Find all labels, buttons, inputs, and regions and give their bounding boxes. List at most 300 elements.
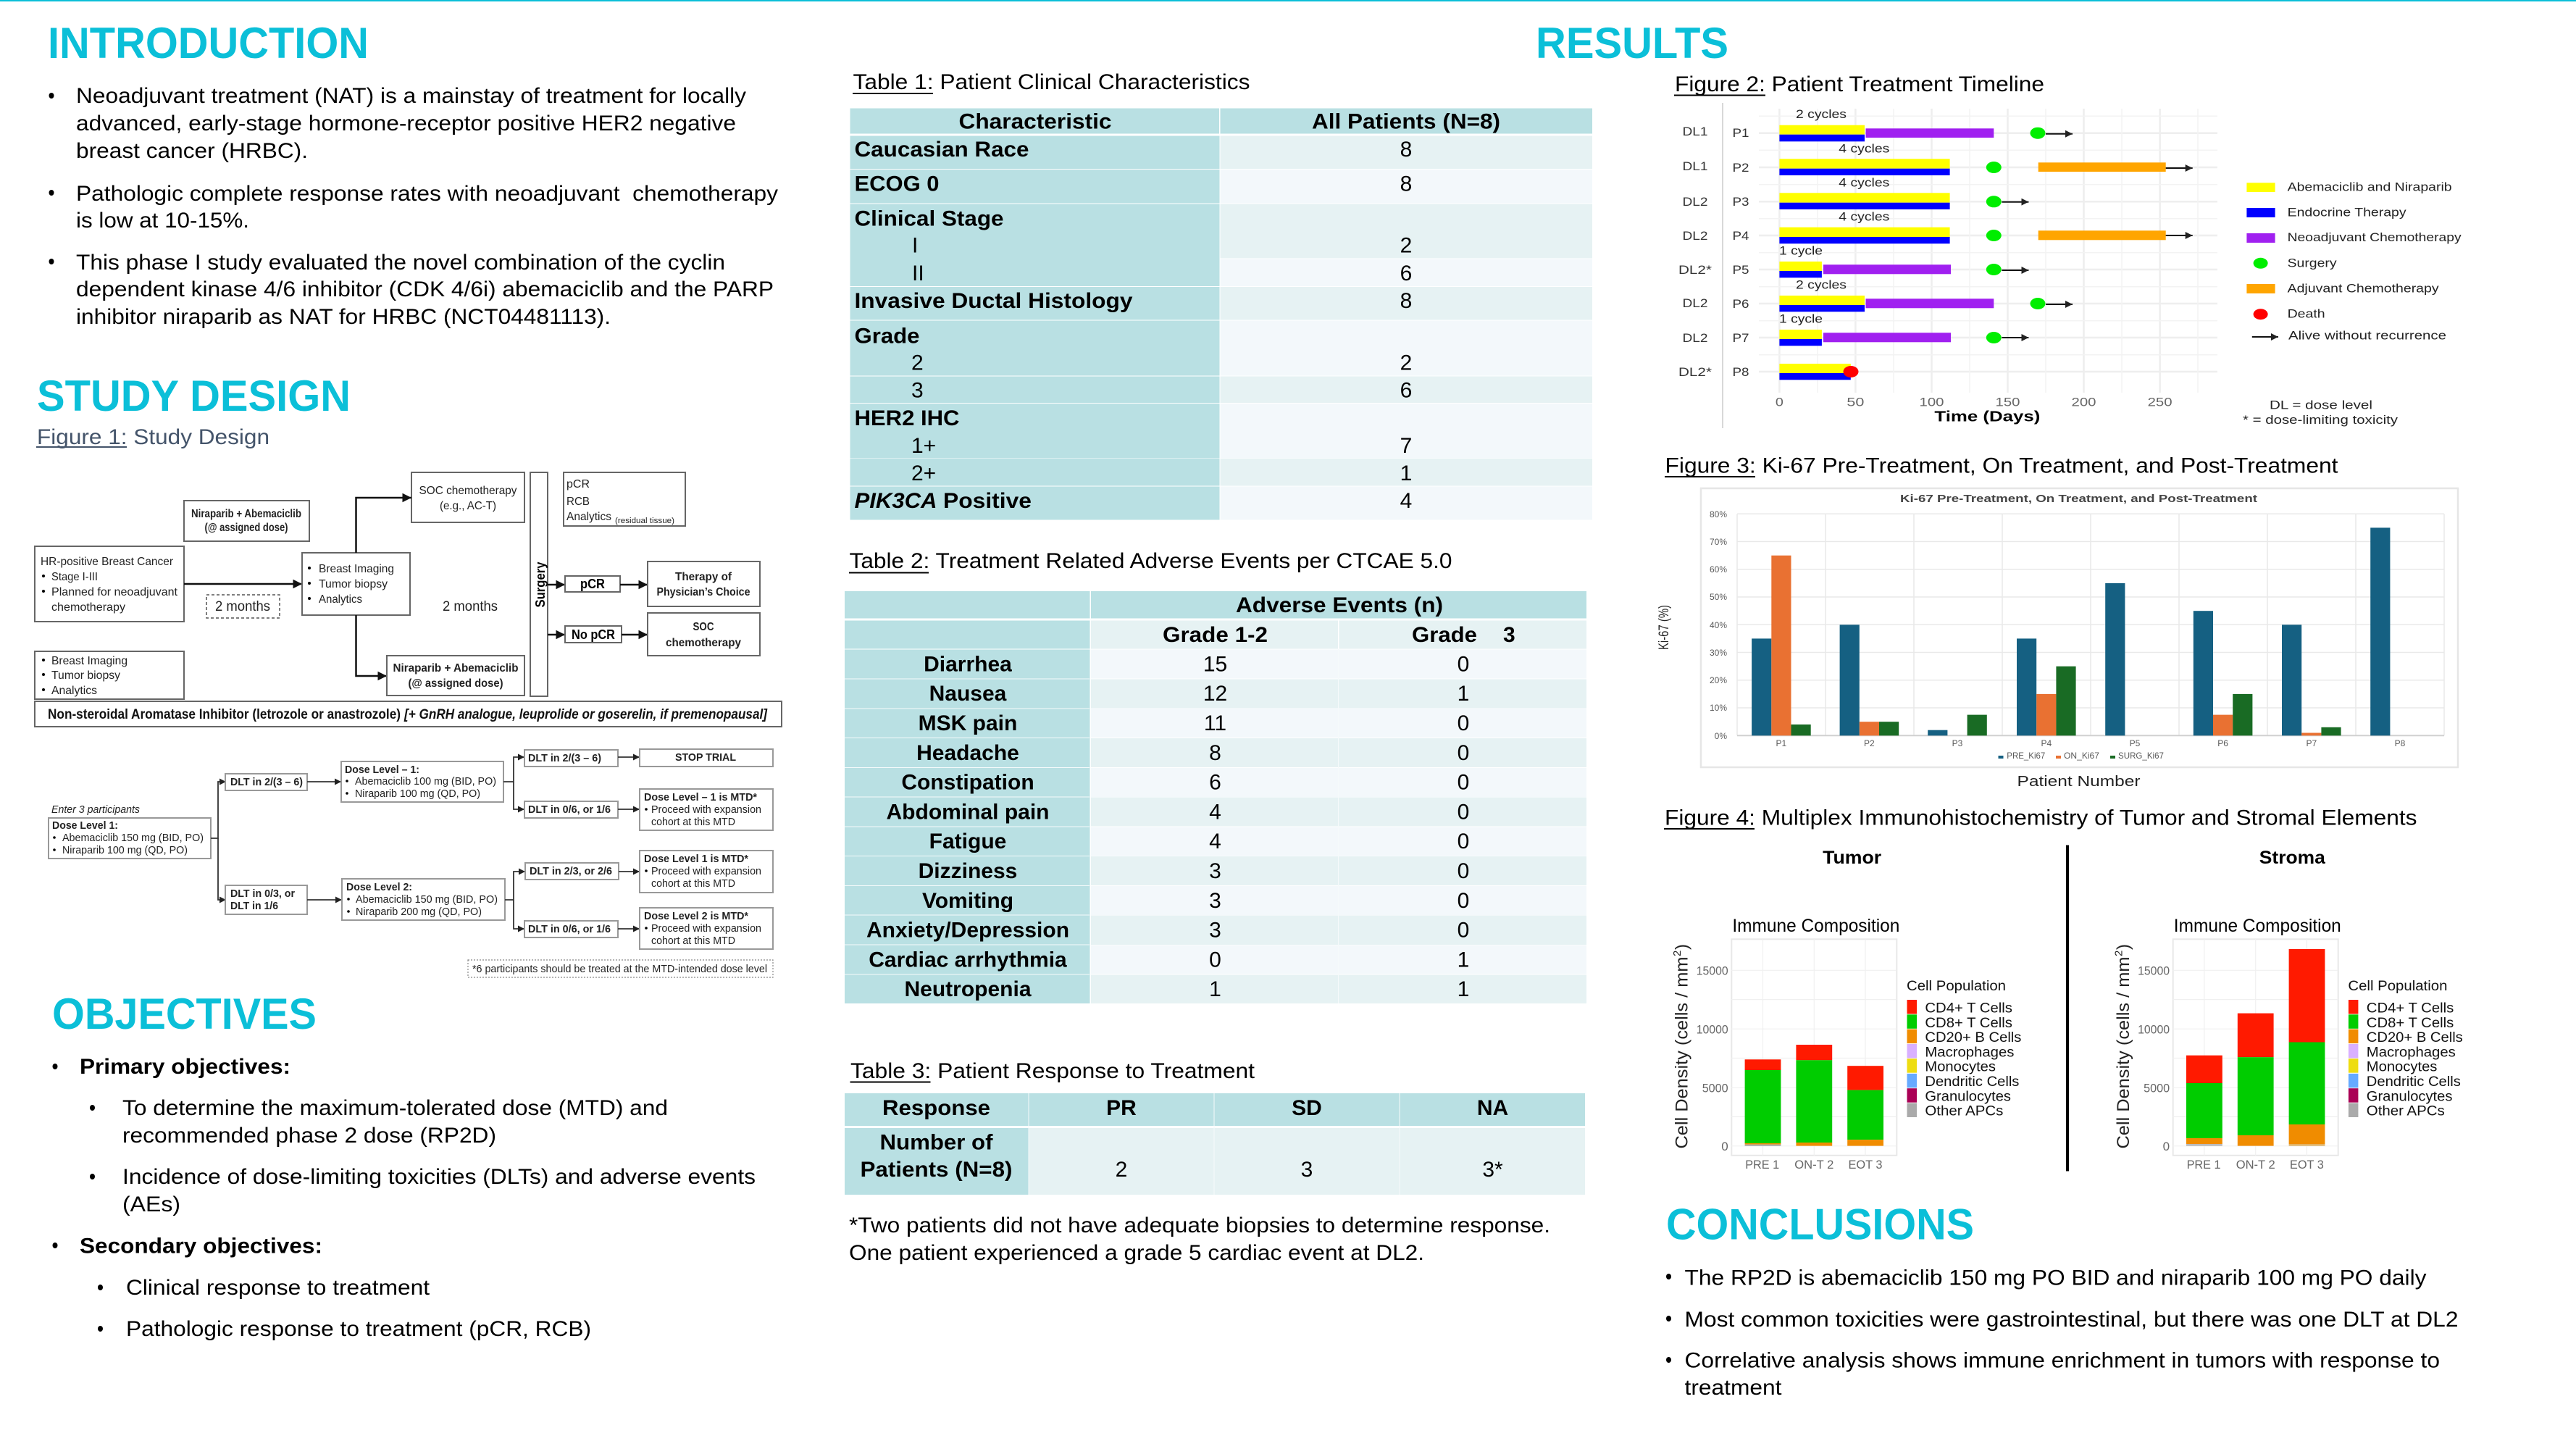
bars: treatment: [1779, 125, 2166, 380]
box: DLT 0 of 6 upper: DLT in 0/6, or 1/6: [528, 803, 611, 816]
table: patient clinical characteristics: Grade: [855, 325, 920, 348]
table: treatment related adverse events: 0: [1458, 652, 1469, 676]
arrow: surgery to pCR: [548, 584, 565, 585]
box: dose level 2: Abemaciclib 150 mg (BID, PO): [356, 893, 498, 906]
box: niraparib plus abemaciclib top: (@ assigned dose): [204, 522, 288, 534]
caption: table 2: Table 2: Treatment Related Adverse Events per CTCAE 5.0: [849, 549, 1452, 573]
table: patient clinical characteristics: Caucasian Race: [855, 138, 1029, 162]
axis: tumor: 15000: [1697, 964, 1728, 978]
box: aromatase inhibitor backbone: Non-steroidal Aromatase Inhibitor (letrozole or anastrozole): [48, 707, 401, 722]
heading: study design: STUDY DESIGN: [37, 372, 351, 420]
box: dose level 2 is MTD: Dose Level 2 is MTD*: [644, 910, 748, 922]
box: DLT 0 of 6 lower: DLT in 0/6, or 1/6: [528, 923, 611, 935]
connector: dose level minus 1 down: [514, 782, 524, 809]
table: patient clinical characteristics: [850, 109, 1592, 520]
arrow: to dose level minus 1: [307, 781, 341, 782]
table: patient response to treatment: SD: [1292, 1096, 1322, 1120]
box: dose level 1 is MTD: Proceed with expansion: [651, 865, 761, 877]
box: niraparib plus abemaciclib bottom: Niraparib + Abemaciclib: [393, 662, 519, 675]
caption: figure 2: Figure 2: Patient Treatment Timeline: [1675, 72, 2044, 96]
axis labels: P7: [2306, 738, 2317, 748]
axis: stroma: 5000: [2144, 1081, 2170, 1095]
table: treatment related adverse events: 12: [1203, 682, 1227, 706]
heading: tumor: Tumor: [1823, 848, 1881, 868]
table: treatment related adverse events: MSK pain: [919, 711, 1017, 735]
bar: surgery: [530, 472, 548, 696]
box: therapy of physician's choice: [648, 561, 760, 606]
table: treatment related adverse events: Nausea: [929, 682, 1007, 706]
table: patient clinical characteristics: 8: [1400, 172, 1412, 196]
box: eligibility: [35, 546, 184, 622]
legend: cell population stroma: Granulocytes: [2367, 1089, 2452, 1104]
arrow: to dose level 2 MTD: [618, 928, 640, 930]
box: dose level 2: [342, 879, 505, 920]
connector: lower branch: [218, 838, 226, 900]
text block: objectives: recommended phase 2 dose (RP2D): [122, 1124, 496, 1148]
axis labels: [1710, 509, 2406, 748]
row labels: dose level and patient: DL2*: [1678, 365, 1712, 379]
axis labels: 10%: [1710, 703, 1727, 713]
axis: time in days: 50: [1847, 396, 1864, 409]
box: stop trial: [640, 749, 773, 767]
legend: treatment: Endocrine Therapy: [2288, 205, 2406, 219]
axis: tumor: 5000: [1702, 1081, 1728, 1095]
table: patient clinical characteristics: 1: [1400, 462, 1412, 485]
labels: cycles: 1 cycle: [1779, 312, 1823, 326]
table: patient response to treatment: 3*: [1482, 1158, 1503, 1182]
legend: cell population stroma: Other APCs: [2367, 1104, 2445, 1119]
legend: PRE_Ki67: [2007, 751, 2046, 761]
table: treatment related adverse events: 15: [1203, 652, 1227, 676]
row labels: dose level and patient: P6: [1733, 297, 1749, 311]
text block: introduction bullets: inhibitor niraparib as NAT for HRBC (NCT04481113).: [76, 305, 611, 329]
table: treatment related adverse events: Vomiting: [922, 889, 1013, 913]
box: therapy of physician's choice: Physician’s Choice: [656, 586, 750, 598]
axis labels: 20%: [1710, 675, 1727, 685]
axis: time in days: [1776, 396, 2173, 425]
axis labels: 30%: [1710, 648, 1727, 658]
heading: objectives: OBJECTIVES: [52, 990, 317, 1038]
note: six participants: [468, 960, 773, 977]
table: patient response to treatment: Patients (N=8): [861, 1158, 1013, 1182]
axis: tumor: [1671, 944, 1882, 1172]
table: patient clinical characteristics: 2: [911, 351, 924, 375]
text block: objectives: [52, 1055, 756, 1341]
arrow: to dose level 1 MTD: [619, 871, 640, 872]
row labels: dose level and patient: P2: [1733, 161, 1749, 175]
labels: cycles: 2 cycles: [1796, 107, 1847, 121]
row labels: dose level and patient: DL2: [1682, 195, 1708, 209]
text block: objectives: Clinical response to treatment: [126, 1276, 430, 1300]
labels: cycles: 4 cycles: [1839, 175, 1889, 189]
axis: tumor: 2: [1671, 951, 1684, 956]
connector: dose level 1 branches: [211, 782, 226, 838]
markers: surgery and death: [1843, 128, 2046, 377]
table: patient response to treatment: PR: [1106, 1096, 1137, 1120]
table: treatment related adverse events: 0: [1458, 741, 1469, 765]
row labels: dose level and patient: P3: [1733, 195, 1749, 209]
axis: time in days: 0: [1776, 396, 1783, 409]
table: patient clinical characteristics: 2+: [911, 462, 936, 485]
row labels: dose level and patient: P5: [1733, 263, 1749, 277]
box: dose level minus 1: [341, 761, 503, 802]
heading: conclusions: CONCLUSIONS: [1666, 1200, 1974, 1249]
table: treatment related adverse events: 8: [1209, 741, 1221, 765]
axis: time in days: 200: [2072, 396, 2096, 409]
text block: conclusions: treatment: [1685, 1376, 1782, 1400]
box: dose level 1: Dose Level 1:: [52, 819, 118, 832]
table: patient clinical characteristics: II: [912, 262, 924, 285]
box: SOC chemotherapy arm: [411, 472, 524, 522]
table: patient clinical characteristics: 8: [1400, 138, 1412, 162]
box: niraparib plus abemaciclib top: [184, 501, 309, 541]
text block: objectives: (AEs): [122, 1193, 180, 1216]
axis labels: P5: [2130, 738, 2141, 748]
legend: cell population stroma: CD8+ T Cells: [2367, 1016, 2454, 1031]
axis: tumor: EOT 3: [1849, 1158, 1882, 1172]
note: six participants: *6 participants should be treated at the MTD-intended dose level: [472, 963, 767, 975]
table: patient clinical characteristics: 2: [1400, 233, 1412, 258]
caption: table 3: Table 3: Patient Response to Treatment: [850, 1059, 1255, 1083]
table: patient clinical characteristics: Characteristic: [959, 110, 1111, 133]
axis: time in days: 100: [1920, 396, 1944, 409]
box: baseline assessments: Breast Imaging: [51, 655, 127, 667]
table: patient clinical characteristics: Positive: [943, 489, 1032, 513]
axis title: patient number: Patient Number: [2017, 774, 2141, 790]
footnote: table 3: One patient experienced a grade 5 cardiac event at DL2.: [849, 1241, 1424, 1265]
table: treatment related adverse events: Adverse Events (n): [1236, 593, 1443, 617]
legend: cell population tumor: CD20+ B Cells: [1925, 1030, 2021, 1045]
legend: cell population tumor: CD4+ T Cells: [1925, 1001, 2012, 1016]
table: treatment related adverse events: 4: [1209, 830, 1221, 853]
row labels: dose level and patient: DL2: [1682, 331, 1708, 345]
stacked bars: stroma: [2186, 949, 2325, 1146]
row labels: dose level and patient: DL2*: [1678, 263, 1712, 277]
text block: introduction bullets: Pathologic complete response rates with neoadjuvant chemotherapy: [76, 182, 778, 206]
chart: stroma immune composition: [2112, 916, 2463, 1172]
box: eligibility: Planned for neoadjuvant: [51, 586, 178, 598]
box: surgery endpoints: pCR: [566, 478, 590, 490]
legend: cell population tumor: [1907, 979, 2021, 1119]
legend: cell population tumor: Monocytes: [1925, 1060, 1996, 1075]
dashed box: 2 months: [206, 595, 280, 618]
footnote: table 3: [849, 1214, 1550, 1265]
labels: cycles: 2 cycles: [1796, 277, 1847, 291]
text block: introduction bullets: breast cancer (HRBC).: [76, 139, 308, 163]
axis: tumor: 0: [1721, 1140, 1728, 1153]
box: stop trial: STOP TRIAL: [675, 751, 736, 764]
legend: treatment: Alive without recurrence: [2288, 328, 2446, 342]
legend: cell population tumor: Granulocytes: [1925, 1089, 2011, 1104]
axis labels: 50%: [1710, 592, 1727, 602]
box: surgery endpoints: Analytics: [566, 511, 611, 523]
row labels: dose level and patient: P7: [1733, 331, 1749, 345]
table: patient response to treatment: Response: [882, 1096, 990, 1120]
box: DLT upper: [524, 750, 618, 767]
box: imaging biopsy analytics: Breast Imaging: [319, 563, 394, 575]
table: treatment related adverse events: Grade: [1412, 623, 1477, 647]
box: DLT 0 of 6 upper: [524, 801, 618, 818]
box: imaging biopsy analytics: Tumor biopsy: [319, 578, 388, 590]
table: treatment related adverse events: Fatigue: [929, 830, 1006, 853]
box: dose level 2: Niraparib 200 mg (QD, PO): [356, 906, 482, 918]
axis title: Ki-67: Ki-67 (%): [1657, 605, 1672, 650]
legend: cell population tumor: CD8+ T Cells: [1925, 1016, 2012, 1031]
table: patient clinical characteristics: 4: [1400, 489, 1412, 513]
box: SOC chemotherapy arm: (e.g., AC-T): [440, 500, 496, 512]
arrow: to stop trial: [618, 756, 640, 758]
axis labels: P2: [1864, 738, 1875, 748]
arrow: no pCR to SOC: [622, 634, 648, 635]
table: treatment related adverse events: 3: [1503, 623, 1515, 647]
box: eligibility: HR-positive Breast Cancer: [41, 556, 174, 568]
box: dose level minus 1 is MTD: cohort at this MTD: [651, 816, 735, 828]
labels: cycles: [1779, 107, 1889, 326]
text block: introduction bullets: dependent kinase 4/6 inhibitor (CDK 4/6i) abemaciclib and the PARP: [76, 277, 774, 301]
axis: tumor: 10000: [1697, 1023, 1728, 1036]
connector: dose level minus 1 up: [503, 757, 524, 782]
box: dose level 1 is MTD: cohort at this MTD: [651, 877, 735, 890]
table: treatment related adverse events: 4: [1209, 800, 1221, 824]
arrow: eligibility to imaging: [184, 583, 302, 585]
axis: stroma: 15000: [2138, 964, 2170, 978]
row labels: dose level and patient: [1678, 125, 1749, 379]
legend: cell population stroma: CD20+ B Cells: [2367, 1030, 2463, 1045]
footnote: table 3: *Two patients did not have adequate biopsies to determine response.: [849, 1214, 1550, 1237]
legend: cell population tumor: Macrophages: [1925, 1045, 2014, 1061]
legend: treatment: Abemaciclib and Niraparib: [2288, 180, 2452, 193]
row labels: dose level and patient: DL2: [1682, 229, 1708, 243]
text block: objectives: Incidence of dose-limiting toxicities (DLTs) and adverse events: [122, 1165, 756, 1189]
heading: results: RESULTS: [1536, 19, 1728, 67]
note: enter 3 participants: Enter 3 participants: [51, 803, 140, 816]
legend: treatment: Neoadjuvant Chemotherapy: [2288, 230, 2462, 244]
bars: surgery: [1791, 667, 2341, 735]
axis: stroma: EOT 3: [2290, 1158, 2324, 1172]
axis: stroma: 10000: [2138, 1023, 2170, 1036]
table: patient clinical characteristics: 2: [1400, 351, 1412, 375]
legend: cell population stroma: Macrophages: [2367, 1045, 2456, 1061]
table: treatment related adverse events: 3: [1209, 889, 1221, 913]
table: patient clinical characteristics: 1+: [911, 434, 936, 458]
table: patient clinical characteristics: I: [912, 233, 918, 258]
legend: ON_Ki67: [2064, 751, 2099, 761]
table: treatment related adverse events: 0: [1458, 800, 1469, 824]
box: DLT upper: DLT in 2/(3 – 6): [528, 752, 601, 764]
table: treatment related adverse events: 0: [1458, 919, 1469, 943]
axis labels: P6: [2217, 738, 2228, 748]
chart title: Ki-67 Pre-Treatment, On Treatment, and Post-Treatment: [1900, 493, 2257, 505]
box: baseline assessments: [35, 651, 184, 699]
table: treatment related adverse events: 11: [1204, 711, 1226, 735]
arrow: to SOC chemotherapy: [356, 498, 411, 553]
table: treatment related adverse events: 1: [1209, 977, 1221, 1001]
text block: objectives: Primary objectives:: [80, 1055, 290, 1079]
caption: figure 4: Figure 4: Multiplex Immunohistochemistry of Tumor and Stromal Elements: [1665, 806, 2417, 830]
chart: stroma immune composition: Immune Composition: [2174, 916, 2341, 936]
bar: surgery: Surgery: [533, 562, 548, 607]
connector: dose level 2 down: [514, 900, 524, 929]
table: treatment related adverse events: Dizziness: [919, 859, 1017, 883]
legend: SURG_Ki67: [2118, 751, 2164, 761]
box: aromatase inhibitor backbone: [35, 701, 782, 727]
table: patient clinical characteristics: All Patients (N=8): [1312, 110, 1500, 133]
heading: introduction: INTRODUCTION: [48, 19, 369, 67]
legend: treatment: Surgery: [2288, 256, 2337, 270]
caption: figure 1: Figure 1: Study Design: [37, 425, 269, 449]
box: SOC chemotherapy arm: SOC chemotherapy: [419, 485, 517, 497]
table: treatment related adverse events: 0: [1458, 771, 1469, 795]
axis labels: 60%: [1710, 564, 1727, 575]
connector: dose level 2 up: [505, 872, 525, 900]
axis: stroma: ON-T 2: [2236, 1158, 2275, 1172]
axis: stroma: 0: [2163, 1140, 2170, 1153]
axis: tumor: Cell Density (cells / mm: [1672, 956, 1691, 1149]
table: patient clinical characteristics: 8: [1400, 289, 1412, 313]
legend: cell population stroma: Dendritic Cells: [2367, 1074, 2461, 1090]
text block: conclusions: Correlative analysis shows immune enrichment in tumors with response to: [1685, 1349, 2440, 1373]
row labels: dose level and patient: DL1: [1682, 125, 1708, 138]
box: no pCR: No pCR: [572, 627, 615, 642]
legend: cell population stroma: CD4+ T Cells: [2367, 1001, 2454, 1016]
arrow: to dose level 2: [307, 899, 342, 901]
table: treatment related adverse events: 6: [1209, 771, 1221, 795]
legend: cell population stroma: Cell Population: [2348, 979, 2447, 994]
box: dose level 2 is MTD: Proceed with expansion: [651, 922, 761, 935]
box: niraparib plus abemaciclib bottom: [387, 656, 524, 696]
box: niraparib plus abemaciclib top: Niraparib + Abemaciclib: [191, 508, 301, 520]
axis labels: 70%: [1710, 537, 1727, 547]
chart: tumor immune composition: [1671, 916, 2021, 1172]
table: patient clinical characteristics: ECOG 0: [855, 172, 939, 196]
axis: stroma: PRE 1: [2187, 1158, 2221, 1172]
stacked bars: tumor: [1745, 1045, 1883, 1146]
dashed box: 2 months: 2 months: [215, 599, 270, 614]
table: treatment related adverse events: 1: [1458, 948, 1469, 972]
axis: stroma: 2: [2112, 951, 2125, 956]
box: eligibility: chemotherapy: [51, 601, 125, 614]
axis labels: P3: [1952, 738, 1963, 748]
text block: introduction bullets: advanced, early-stage hormone-receptor positive HER2 negative: [76, 112, 736, 135]
table: treatment related adverse events: [845, 591, 1586, 1003]
box: dose level 2: Dose Level 2:: [346, 881, 412, 893]
legend: cell population tumor: Cell Population: [1907, 979, 2006, 994]
legend: [1998, 751, 2164, 761]
box: DLT in 2 of 3 to 6: [225, 774, 307, 790]
box: DLT in 0 of 3: [225, 885, 307, 914]
row labels: dose level and patient: P8: [1733, 365, 1749, 379]
heading: stroma: Stroma: [2259, 848, 2326, 868]
divider: tumor and stroma: [2066, 845, 2069, 1171]
box: dose level minus 1: Abemaciclib 100 mg (BID, PO): [355, 775, 496, 788]
arrow: to niraparib arm: [356, 615, 387, 676]
legend: cell population tumor: Dendritic Cells: [1925, 1074, 2019, 1090]
table: treatment related adverse events: Anxiety/Depression: [866, 919, 1069, 943]
chart: patient treatment timeline: [1678, 103, 2462, 428]
box: DLT in 0 of 3: DLT in 1/6: [230, 900, 278, 912]
box: pCR: [565, 576, 620, 592]
text block: conclusions: [1666, 1266, 2459, 1400]
axis: tumor: PRE 1: [1745, 1158, 1779, 1172]
legend: treatment: [2246, 180, 2462, 342]
table: treatment related adverse events: 0: [1458, 889, 1469, 913]
note: abbreviations: DL = dose level: [2270, 398, 2372, 412]
box: DLT in 2 of 3 lower: [525, 863, 619, 880]
table: patient response to treatment: Number of: [879, 1130, 994, 1155]
row labels: dose level and patient: P1: [1733, 126, 1749, 140]
box: eligibility: Stage I-III: [51, 571, 98, 583]
box: dose level 1: [49, 818, 211, 859]
box: imaging biopsy analytics: Analytics: [319, 593, 362, 606]
table: treatment related adverse events: Constipation: [901, 771, 1034, 795]
table: patient clinical characteristics: HER2 IHC: [855, 406, 959, 430]
note: abbreviations: * = dose-limiting toxicity: [2243, 413, 2399, 427]
axis: stroma: Cell Density (cells / mm: [2114, 956, 2133, 1149]
caption: figure 3: Figure 3: Ki-67 Pre-Treatment, On Treatment, and Post-Treatment: [1665, 454, 2338, 477]
table: treatment related adverse events: 0: [1458, 859, 1469, 883]
diagram: study schema: [35, 472, 782, 727]
chart: tumor immune composition: Immune Composition: [1732, 916, 1899, 936]
axis labels: P4: [2041, 738, 2052, 748]
box: DLT in 2 of 3 to 6: DLT in 2/(3 – 6): [230, 776, 303, 788]
box: surgery endpoints: (residual tissue): [615, 517, 674, 525]
table: treatment related adverse events: 1: [1458, 977, 1469, 1001]
table: patient clinical characteristics: Clinical Stage: [855, 207, 1004, 230]
box: dose level 2 is MTD: [640, 908, 773, 949]
legend: cell population stroma: [2348, 979, 2463, 1119]
table: patient clinical characteristics: 7: [1400, 434, 1412, 458]
box: SOC chemotherapy after surgery: chemotherapy: [666, 637, 741, 649]
caption: table 1: Table 1: Patient Clinical Characteristics: [853, 70, 1250, 94]
box: aromatase inhibitor backbone: [+ GnRH analogue, leuprolide or goserelin, if premenopausal]: [403, 707, 768, 722]
labels: cycles: 4 cycles: [1839, 142, 1889, 156]
legend: cell population tumor: Other APCs: [1925, 1104, 2003, 1119]
axis: time in days: 250: [2148, 396, 2173, 409]
table: patient clinical characteristics: 6: [1400, 378, 1412, 403]
axis: stroma: ): [2114, 944, 2133, 950]
arrows: alive without recurrence: [2002, 134, 2193, 338]
axis labels: P1: [1776, 738, 1787, 748]
text block: introduction bullets: is low at 10-15%.: [76, 209, 249, 233]
legend: treatment: Death: [2288, 306, 2325, 320]
table: treatment related adverse events: 1: [1458, 682, 1469, 706]
arrow: to dose level minus 1 MTD: [618, 809, 640, 810]
box: dose level 2 is MTD: cohort at this MTD: [651, 935, 735, 947]
diagram: dose escalation: [49, 749, 773, 977]
labels: cycles: 4 cycles: [1839, 210, 1889, 224]
axis labels: 80%: [1710, 509, 1727, 519]
table: patient response to treatment: [845, 1093, 1585, 1195]
labels: cycles: 1 cycle: [1779, 244, 1823, 258]
table: treatment related adverse events: 0: [1458, 830, 1469, 853]
chart: Ki-67 bar chart: [1701, 488, 2458, 767]
box: baseline assessments: Tumor biopsy: [51, 669, 120, 682]
box: SOC chemotherapy after surgery: SOC: [693, 621, 714, 633]
box: dose level minus 1 is MTD: Dose Level – 1 is MTD*: [644, 791, 757, 803]
box: DLT in 2 of 3 lower: DLT in 2/3, or 2/6: [530, 865, 612, 877]
row labels: dose level and patient: DL1: [1682, 159, 1708, 173]
table: treatment related adverse events: Diarrhea: [924, 652, 1012, 676]
table: treatment related adverse events: Neutropenia: [904, 977, 1032, 1001]
table: treatment related adverse events: 0: [1458, 711, 1469, 735]
box: dose level minus 1 is MTD: [640, 789, 773, 830]
table: treatment related adverse events: 3: [1209, 919, 1221, 943]
text block: objectives: Pathologic response to treatment (pCR, RCB): [126, 1317, 591, 1341]
table: patient clinical characteristics: 3: [911, 378, 924, 403]
box: dose level 1 is MTD: Dose Level 1 is MTD*: [644, 853, 748, 865]
box: therapy of physician's choice: Therapy of: [675, 571, 732, 583]
label: 2 months: 2 months: [443, 599, 498, 614]
